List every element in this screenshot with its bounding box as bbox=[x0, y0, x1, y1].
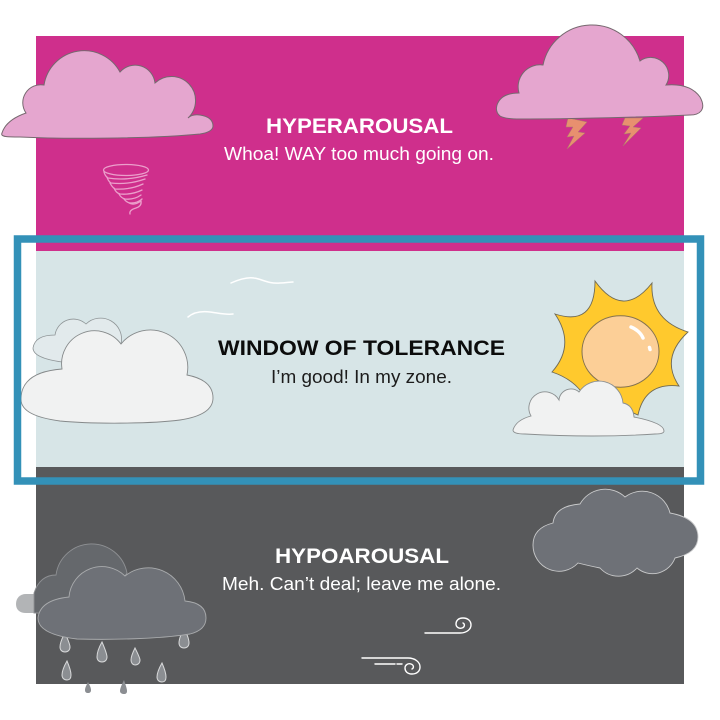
heading: hypoarousal: HYPOAROUSAL bbox=[275, 544, 449, 568]
pink background bbox=[36, 36, 684, 251]
text: window of tolerance description: I’m good! In my zone. bbox=[271, 366, 452, 387]
icon: large white cloud bbox=[21, 330, 213, 423]
icon: sun disc bbox=[582, 316, 659, 387]
icon: tornado bbox=[104, 164, 148, 214]
blue window frame bbox=[18, 239, 700, 481]
panel: hypoarousal bbox=[16, 467, 698, 694]
icon: faded cloud edge bbox=[16, 594, 36, 613]
heading: window of tolerance: WINDOW OF TOLERANCE bbox=[218, 336, 505, 360]
icon: wind swirl upper bbox=[425, 618, 471, 633]
pale blue background bbox=[36, 251, 684, 467]
dark grey background bbox=[36, 467, 684, 684]
icon: right grey cloud bbox=[533, 489, 698, 576]
icon: pink storm cloud bbox=[496, 25, 703, 119]
icon: thunder cloud lightning bolt left bbox=[566, 118, 587, 149]
icon: raindrops bbox=[60, 628, 189, 694]
icon: white cloud over sun bbox=[513, 381, 664, 436]
panel: window of tolerance bbox=[21, 251, 688, 467]
icon: sun rays bbox=[552, 281, 688, 415]
heading: hyperarousal: HYPERAROUSAL bbox=[266, 114, 453, 138]
icon: thunder cloud lightning bolt right bbox=[622, 118, 643, 146]
panel: hyperarousal bbox=[2, 25, 703, 251]
text: hypoarousal description: Meh. Can’t deal; leave me alone. bbox=[222, 573, 501, 594]
icon: front rain cloud bbox=[38, 567, 206, 639]
icon: sun highlight bbox=[631, 327, 650, 350]
icon: white wisp lower bbox=[188, 312, 233, 317]
icon: wind swirl lower bbox=[362, 658, 420, 674]
icon: large pink cloud bbox=[2, 51, 213, 138]
icon: white wisp upper bbox=[231, 278, 293, 283]
icon: back rain cloud bbox=[34, 544, 127, 613]
icon: small back cloud bbox=[33, 318, 122, 362]
text: hyperarousal description: Whoa! WAY too much going on. bbox=[224, 143, 494, 164]
